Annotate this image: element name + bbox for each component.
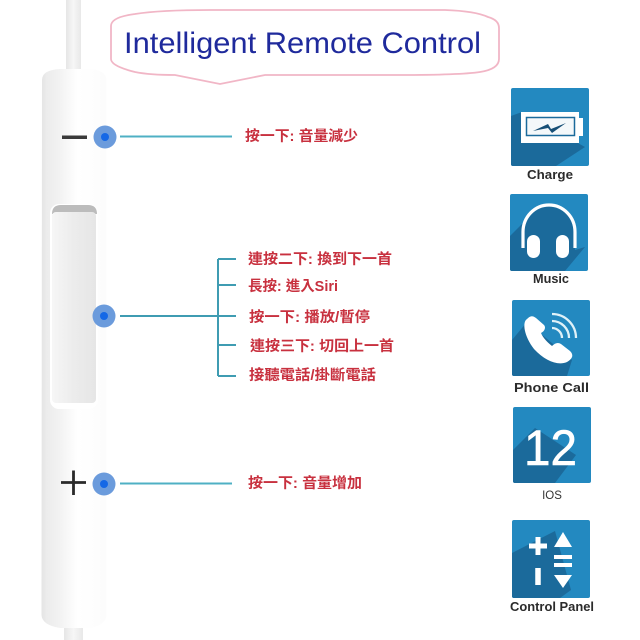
label: music: Music xyxy=(533,271,569,286)
icon: charge xyxy=(511,88,589,182)
label: answer call: 接聽電話/掛斷電話 xyxy=(249,366,377,384)
callout: title bubble xyxy=(111,10,499,84)
label: ios: IOS xyxy=(542,490,562,502)
label: triple press: 連按三下: 切回上一首 xyxy=(250,337,394,355)
earphone remote xyxy=(42,0,106,640)
icon: control panel xyxy=(510,520,594,614)
label: minus: 按一下: 音量減少 xyxy=(245,127,358,145)
remote window xyxy=(50,204,98,409)
plus symbol xyxy=(61,470,86,495)
leader line: plus xyxy=(120,482,232,484)
icon: ios 12: 12 xyxy=(524,420,577,476)
label: single press: 按一下: 播放/暫停 xyxy=(249,308,370,326)
label: charge: Charge xyxy=(527,167,573,182)
label: plus: 按一下: 音量增加 xyxy=(248,474,362,492)
marker: plus button xyxy=(92,472,116,496)
leader line: minus xyxy=(120,136,232,138)
marker: center button xyxy=(92,304,116,328)
icon: phone call xyxy=(512,300,590,395)
label: double press: 連按二下: 換到下一首 xyxy=(248,250,392,268)
minus symbol xyxy=(62,136,87,139)
bracket lines xyxy=(120,259,236,376)
title: Intelligent Remote Control xyxy=(124,27,481,60)
icon: music xyxy=(510,194,588,286)
marker: minus button xyxy=(94,126,116,148)
label: long press: 長按: 進入Siri xyxy=(248,277,338,295)
label: phone call: Phone Call xyxy=(514,380,589,395)
icon: ios 12 xyxy=(513,407,591,502)
label: control panel: Control Panel xyxy=(510,599,594,614)
